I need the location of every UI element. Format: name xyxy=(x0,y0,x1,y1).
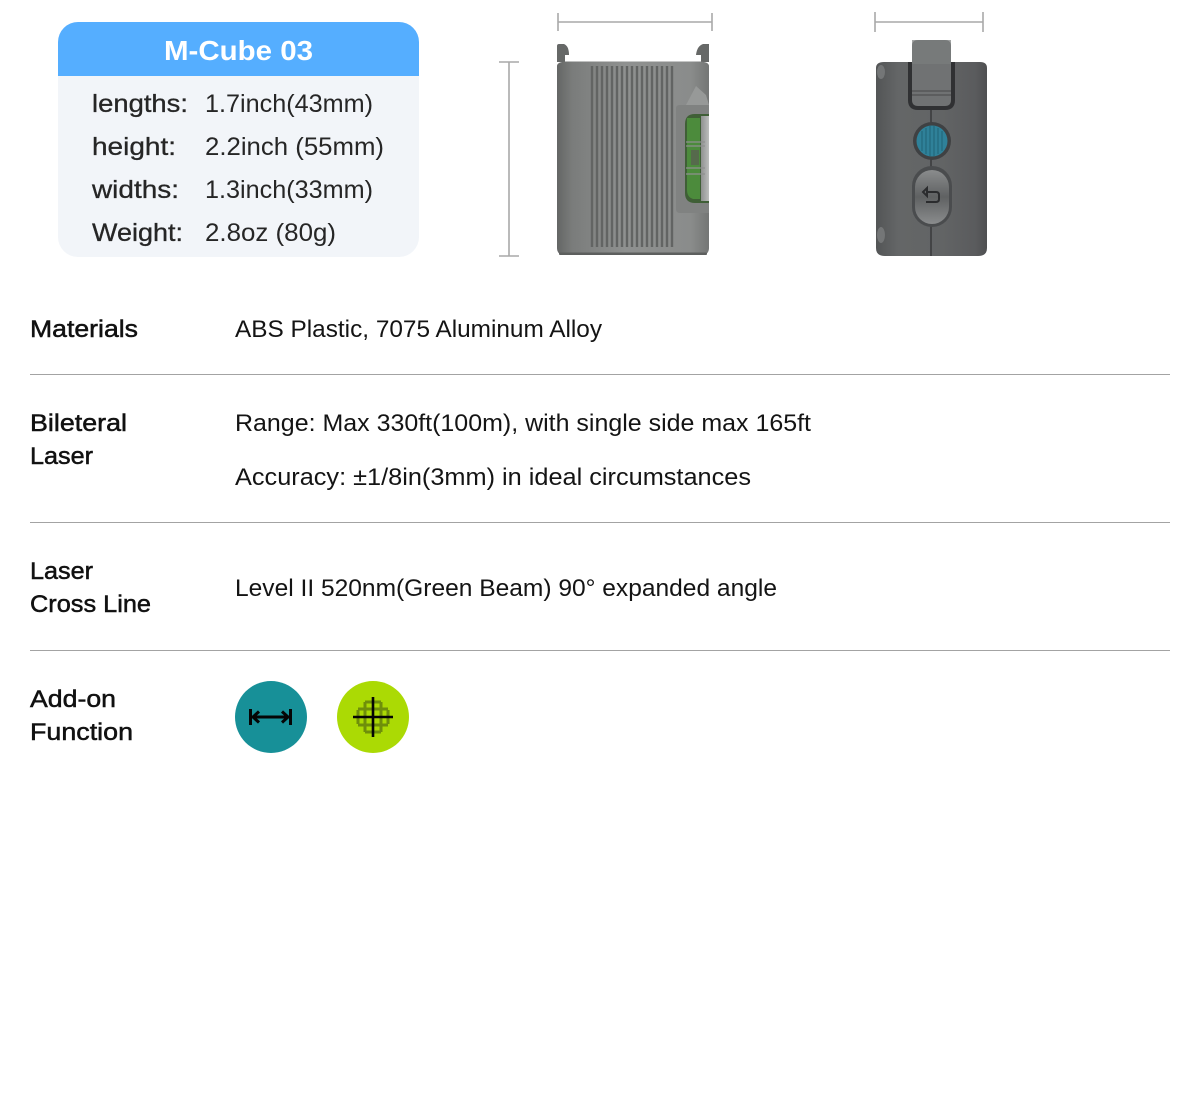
dimension: widths: widths: xyxy=(91,176,179,204)
row: bilateral laser xyxy=(30,410,811,491)
label: Cross Line xyxy=(30,591,151,618)
label: Function xyxy=(30,719,133,746)
cooling grooves xyxy=(592,66,672,247)
dimension line: side view width xyxy=(558,13,712,31)
panel header bar xyxy=(58,22,419,76)
device: front view xyxy=(876,40,987,256)
dimension: weight xyxy=(92,219,336,247)
level window xyxy=(685,114,709,203)
label: Laser xyxy=(30,558,93,585)
dimension: weight: 2.8oz (80g) xyxy=(205,219,336,247)
label: Laser xyxy=(30,443,93,470)
device body xyxy=(557,62,709,255)
teal dial xyxy=(913,122,951,160)
mounting holes xyxy=(877,65,885,243)
dimension: height: 2.2inch (55mm) xyxy=(205,133,384,161)
dimension: lengths: lengths: xyxy=(92,90,188,118)
dimension: lengths xyxy=(92,90,373,118)
dimension: weight: Weight: xyxy=(92,219,183,247)
belt clip xyxy=(908,40,955,110)
panel heading: M-Cube 03 xyxy=(164,35,313,66)
value: ABS Plastic, 7075 Aluminum Alloy xyxy=(235,316,603,343)
row: add-on function xyxy=(30,681,409,753)
dimension: widths: 1.3inch(33mm) xyxy=(205,176,373,204)
label xyxy=(30,686,133,746)
label: Materials xyxy=(30,316,138,343)
label xyxy=(30,558,151,618)
label xyxy=(30,410,127,470)
dimension line: side view height xyxy=(499,62,519,256)
dimension: widths xyxy=(91,176,373,204)
side collar xyxy=(676,105,709,213)
clip hooks xyxy=(557,44,709,62)
value: Level II 520nm(Green Beam) 90° expanded angle xyxy=(235,575,777,602)
panel: M-Cube 03 dimensions xyxy=(58,22,419,257)
label: Add-on xyxy=(30,686,116,713)
dimension line: front view width xyxy=(875,12,983,32)
centre seam xyxy=(930,108,932,256)
device: side view xyxy=(557,44,709,255)
row: materials xyxy=(30,316,603,343)
range value: Range: Max 330ft(100m), with single side max 165ft xyxy=(235,410,811,437)
device body xyxy=(876,62,987,256)
dimension: height: height: xyxy=(92,133,176,161)
label: Bileteral xyxy=(30,410,127,437)
dimension: lengths: 1.7inch(43mm) xyxy=(205,90,373,118)
dimension: height xyxy=(92,133,384,161)
panel background xyxy=(58,22,419,257)
icon: distance measure xyxy=(235,681,307,753)
row: laser cross line xyxy=(30,558,777,618)
accuracy value: Accuracy: ±1/8in(3mm) in ideal circumstances xyxy=(235,464,751,491)
return button xyxy=(912,166,952,227)
icon: cross line grid xyxy=(337,681,409,753)
